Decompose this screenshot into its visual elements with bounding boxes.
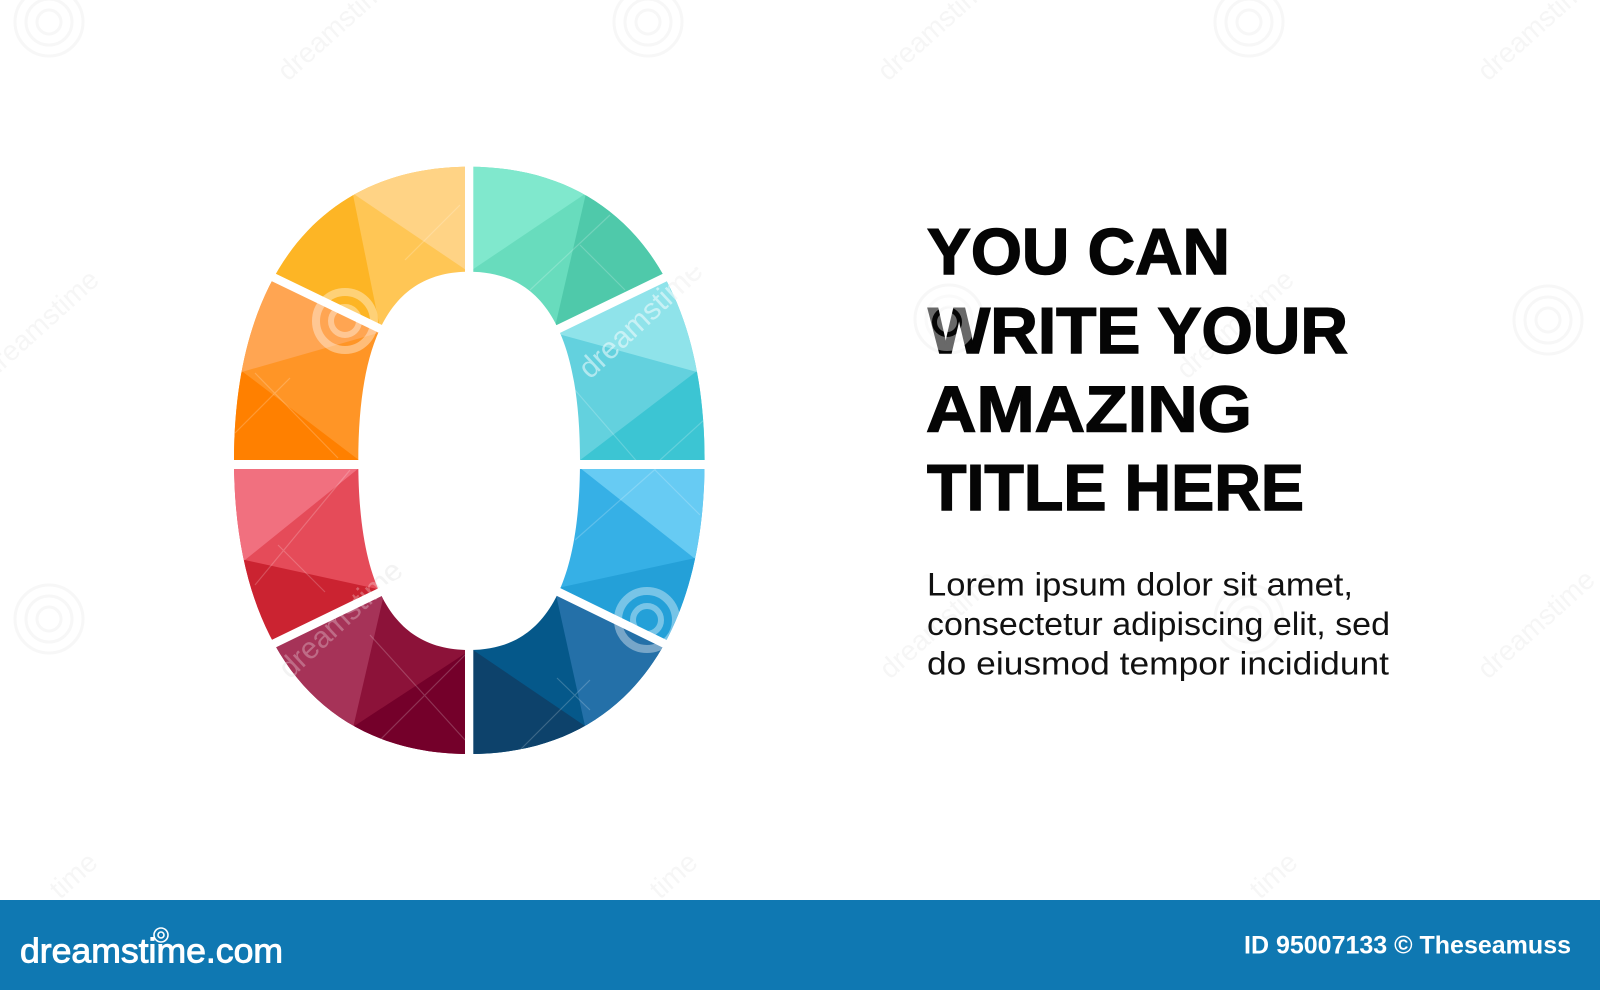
- segment: maroon: [276, 596, 465, 754]
- logo text: dreamstime.com: [20, 933, 283, 971]
- watermark text over the digit: dreamstime: [272, 554, 409, 685]
- watermark: spiral over the W of the title: [925, 300, 969, 344]
- body text: consectetur adipiscing elit, sed: [927, 606, 1390, 642]
- faint page watermarks: time: [643, 846, 703, 904]
- segment: cyan: [560, 281, 705, 460]
- watermark: spiral on orange segment: [316, 292, 374, 350]
- segment: teal: [473, 166, 663, 326]
- segment: orange: [234, 281, 378, 460]
- segment: red: [234, 469, 378, 640]
- footer bar: [0, 900, 1600, 990]
- icon: logo spiral: [154, 928, 168, 942]
- watermark: spiral on blue segment: [618, 591, 676, 649]
- faint page watermarks: time: [1243, 846, 1303, 904]
- body text: do eiusmod tempor incididunt: [927, 645, 1389, 681]
- image id and author: ID 95007133 © Theseamuss: [1244, 931, 1571, 959]
- faint page watermarks: time: [43, 846, 103, 904]
- faint page watermarks: dreamstime: [1170, 264, 1300, 384]
- watermark text over the digit: dreamstime: [572, 254, 709, 385]
- segment: yellow: [276, 166, 465, 325]
- title: WRITE YOUR: [928, 294, 1348, 367]
- watermark text over the digit: [272, 254, 709, 685]
- faint page watermarks: dreamstime: [873, 564, 1003, 684]
- title: AMAZING: [926, 373, 1252, 446]
- faint page watermarks: dreamstime: [272, 554, 409, 685]
- faint page watermarks: dreamstime: [572, 254, 709, 385]
- digit zero made of eight faceted segments: [234, 166, 705, 754]
- title: YOU CAN: [927, 215, 1230, 288]
- title: TITLE HERE: [927, 451, 1304, 524]
- body text: [927, 567, 1390, 681]
- segment: blue: [560, 469, 704, 640]
- body text: Lorem ipsum dolor sit amet,: [927, 567, 1353, 603]
- title: [926, 215, 1348, 524]
- white gaps between the segments: [220, 150, 720, 770]
- faint page watermarks: dreamstime: [1471, 564, 1600, 684]
- segment: navy: [473, 596, 662, 754]
